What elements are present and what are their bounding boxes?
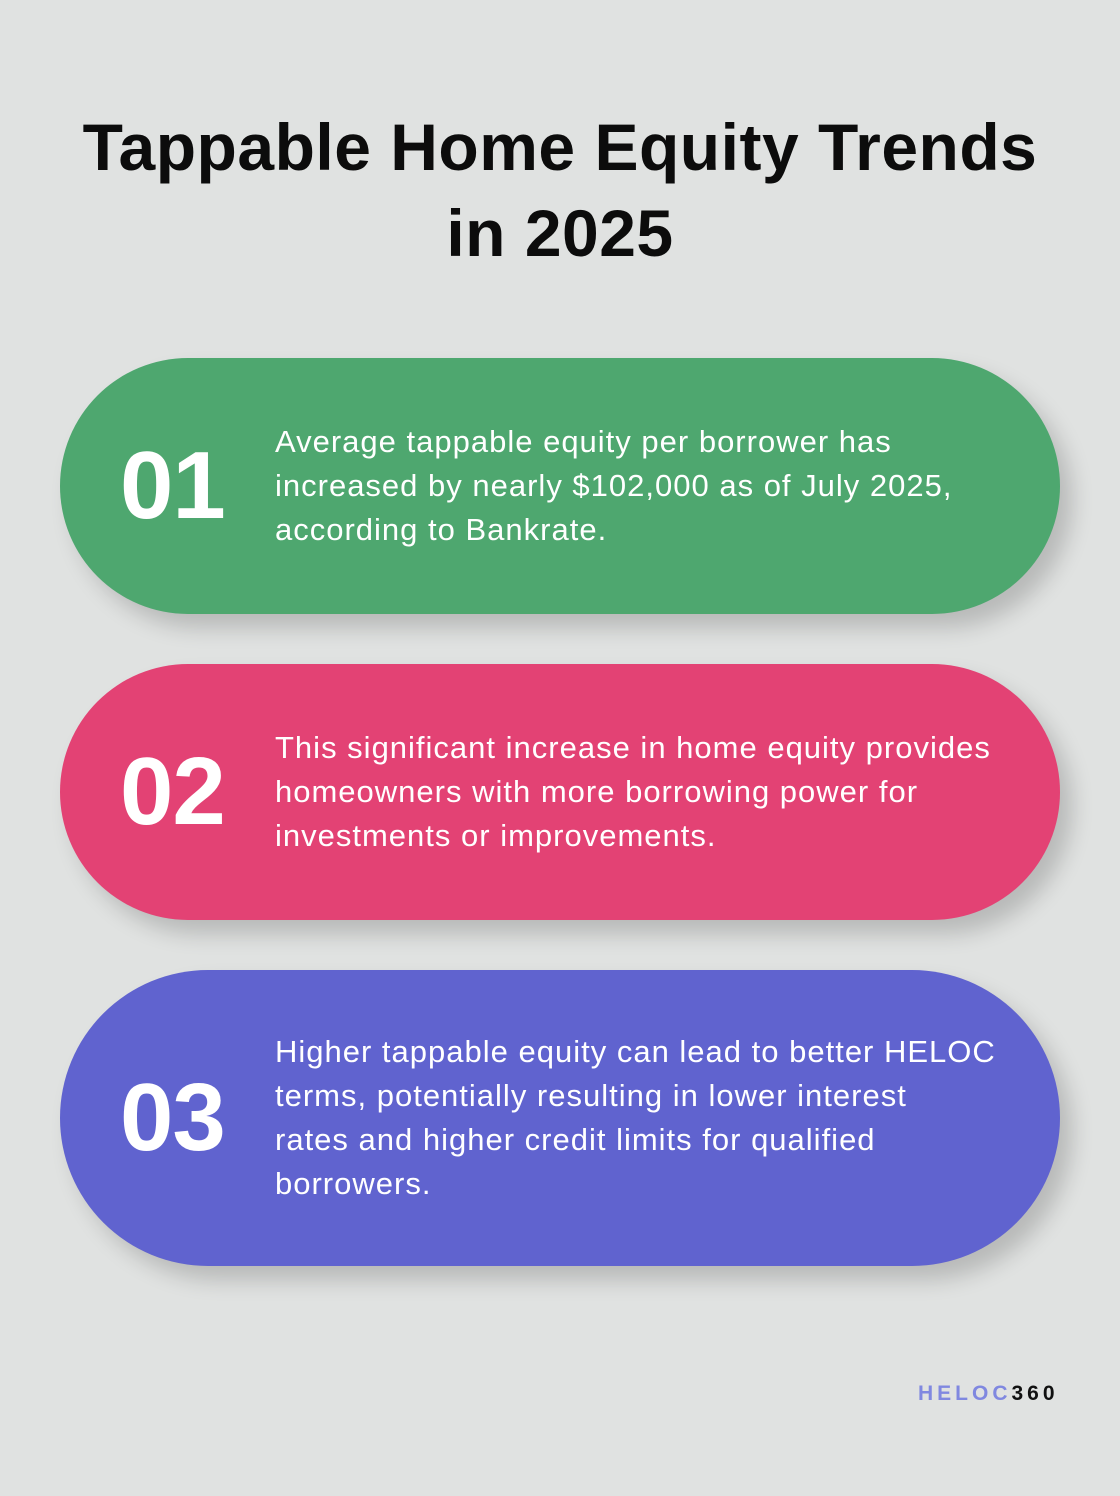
title: [83, 110, 1037, 270]
number 03: 03: [120, 1064, 225, 1171]
text 02: investments or improvements.: [275, 818, 716, 853]
number 01: 01: [120, 432, 225, 539]
text 03: Higher tappable equity can lead to better HELOC: [275, 1034, 996, 1069]
text 02: This significant increase in home equity provides: [275, 730, 991, 765]
text 01: according to Bankrate.: [275, 512, 607, 547]
panel: 01: [60, 358, 1060, 614]
number 02: 02: [120, 738, 225, 845]
title: Tappable Home Equity Trends: [83, 110, 1037, 184]
text 03: rates and higher credit limits for qualified: [275, 1122, 876, 1157]
text 02: [275, 730, 991, 853]
text 03: borrowers.: [275, 1166, 431, 1201]
title: in 2025: [446, 196, 674, 270]
text 01: increased by nearly $102,000 as of July 2025,: [275, 468, 952, 503]
panel: 03: [60, 970, 1060, 1266]
logo: HELOC360: [918, 1382, 1059, 1405]
panel: 02: [60, 664, 1060, 920]
text 01: [275, 424, 952, 547]
text 03: [275, 1034, 996, 1201]
text 01: Average tappable equity per borrower has: [275, 424, 892, 459]
text 02: homeowners with more borrowing power for: [275, 774, 918, 809]
text 03: terms, potentially resulting in lower interest: [275, 1078, 907, 1113]
